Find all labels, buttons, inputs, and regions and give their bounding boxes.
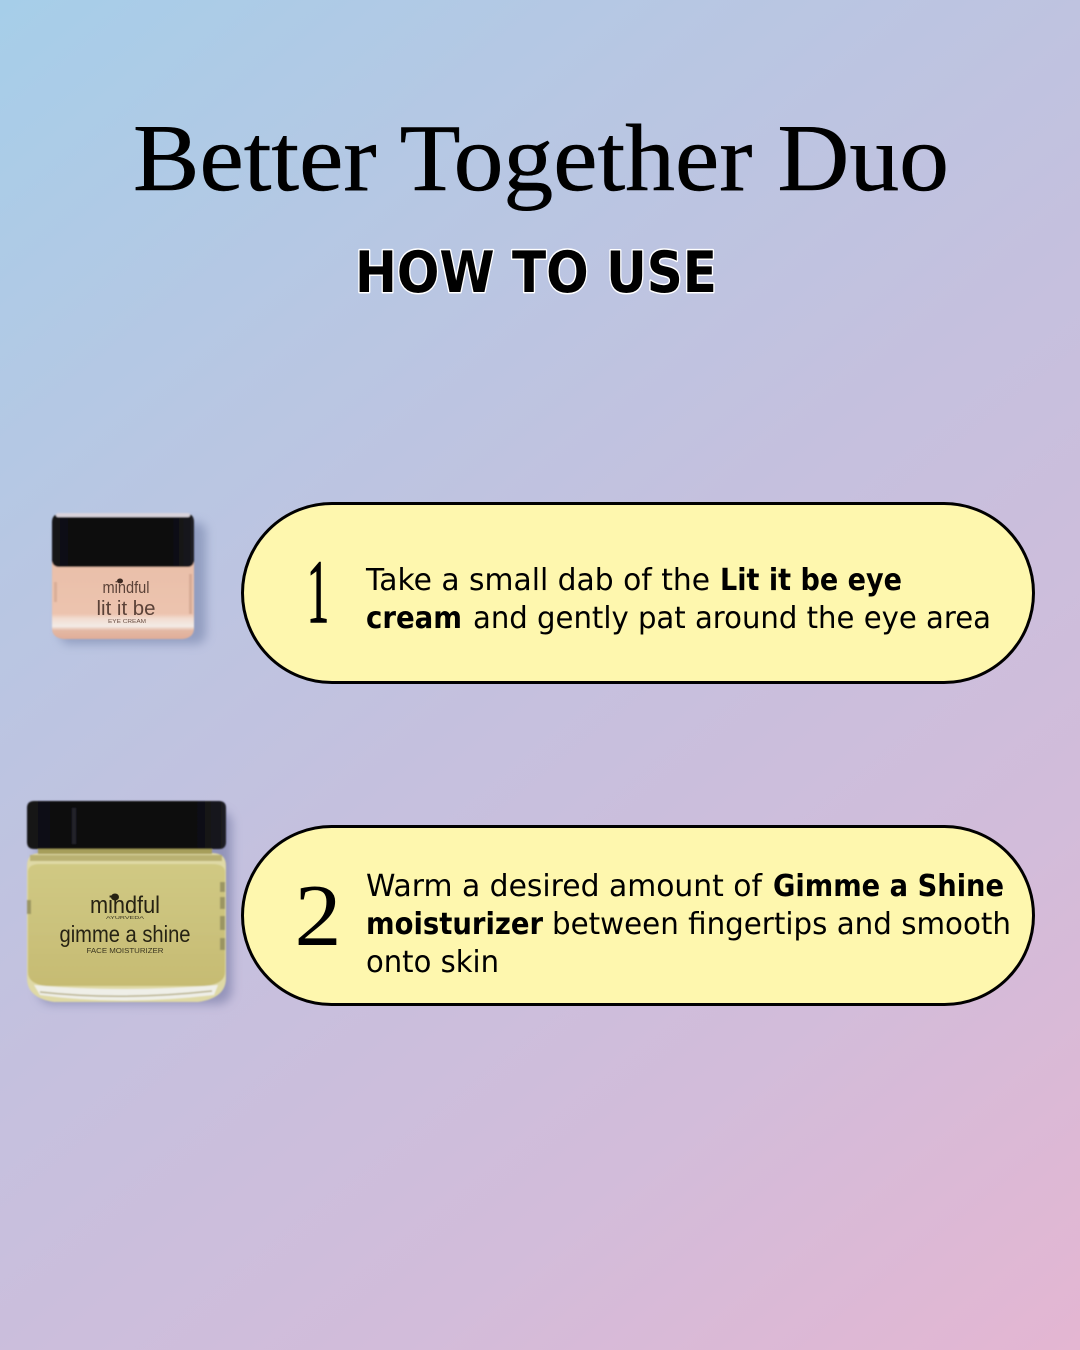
panel: step 1	[242, 504, 1034, 682]
step 2 instructions: Warm a desired amount of	[366, 869, 763, 904]
icon: gimme a shine moisturizer jar: AYURVEDA	[106, 915, 144, 920]
panel: step 2	[242, 826, 1034, 1004]
step number 2: 2	[294, 868, 342, 965]
icon: lit it be eye cream jar: EYE CREAM	[108, 619, 146, 625]
step 1 instructions	[365, 563, 991, 636]
step 2 instructions: onto skin	[366, 945, 499, 980]
step 1 instructions: cream	[366, 601, 462, 636]
step 1 instructions: Take a small dab of the	[365, 563, 710, 598]
step 2 instructions	[366, 869, 1011, 980]
icon: lit it be eye cream jar: lit it be	[96, 598, 156, 620]
icon: gimme a shine moisturizer jar	[27, 801, 232, 1004]
step 2 instructions: Gimme a Shine	[773, 869, 1004, 904]
icon: gimme a shine moisturizer jar: FACE MOISTURIZER	[86, 948, 164, 955]
subheading: HOW TO USE	[355, 240, 717, 306]
panel: step 1: 1	[307, 543, 329, 642]
step 1 instructions: and gently pat around the eye area	[473, 601, 991, 636]
step 2 instructions: between fingertips and smooth	[552, 907, 1011, 942]
icon: lit it be eye cream jar	[52, 513, 206, 644]
step 1 instructions: Lit it be eye	[720, 563, 902, 598]
icon: gimme a shine moisturizer jar: gimme a shine	[60, 921, 190, 947]
icon: lit it be eye cream jar: mindful	[102, 578, 150, 597]
step 2 instructions: moisturizer	[366, 907, 543, 942]
icon: gimme a shine moisturizer jar: mindful	[90, 892, 160, 919]
title: Better Together Duo	[133, 105, 949, 211]
